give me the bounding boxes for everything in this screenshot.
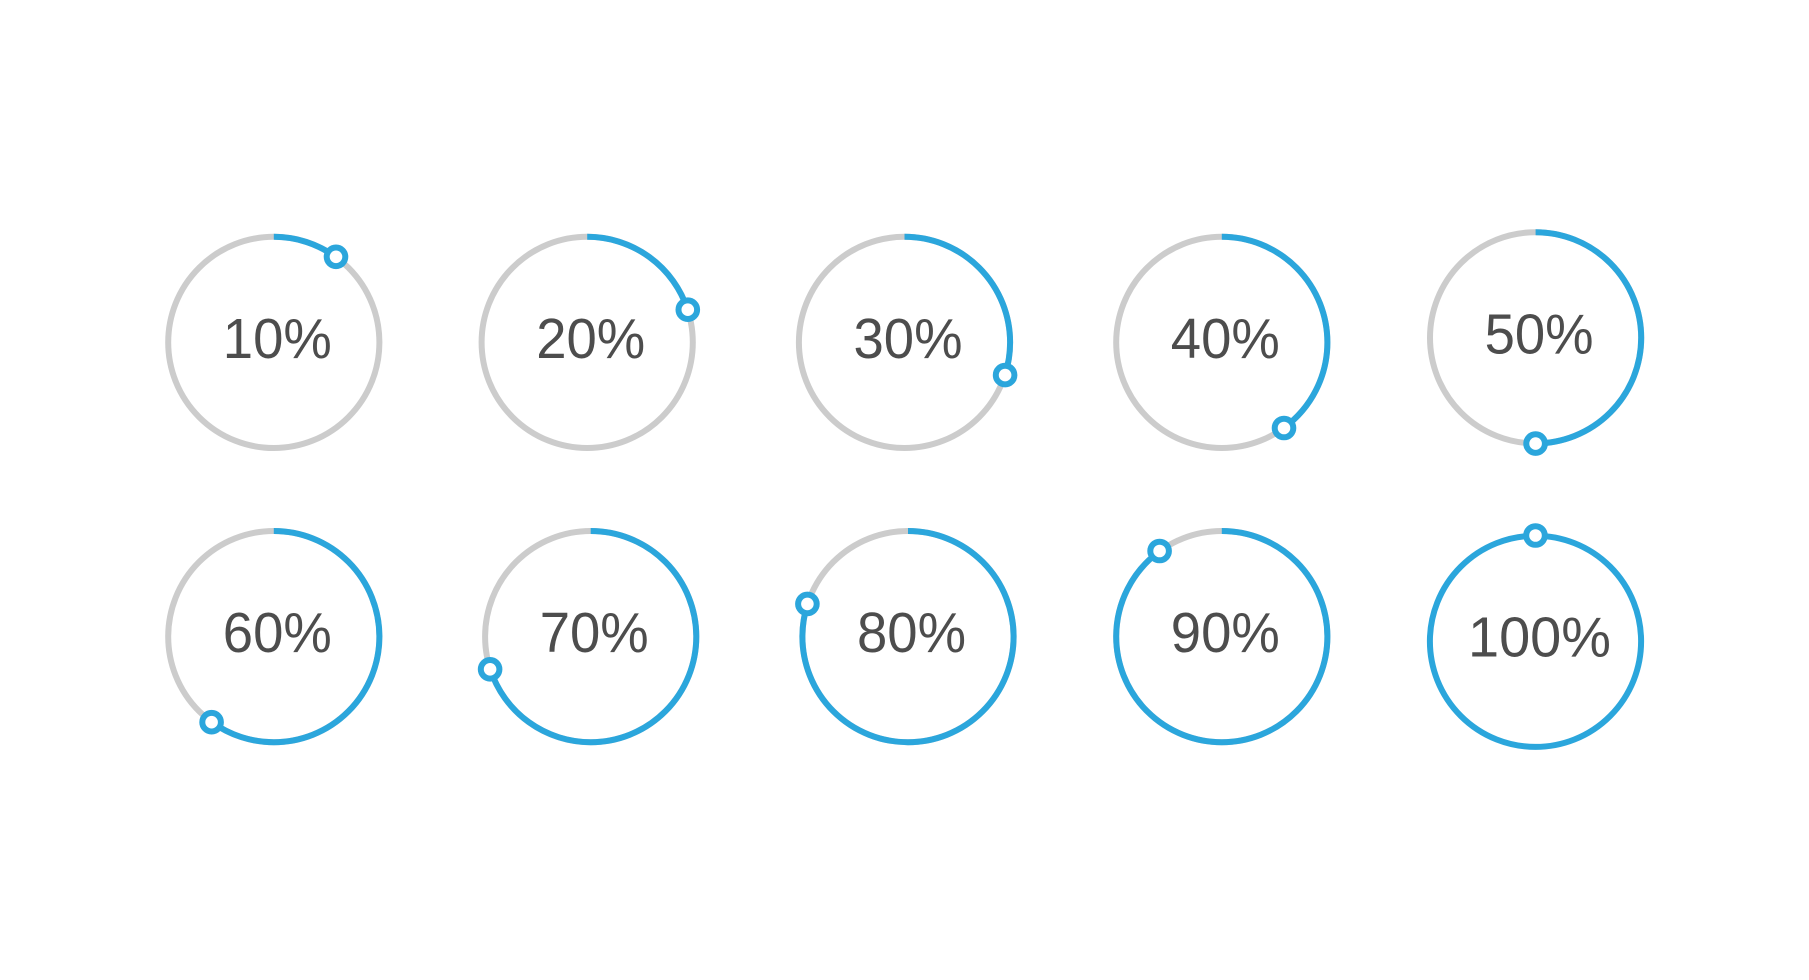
progress ring: 40%: 40% — [1171, 307, 1280, 371]
progress ring: 100%: 100% — [1468, 605, 1611, 669]
progress ring: 80%: 80% — [857, 601, 966, 665]
progress ring: 10%: 10% — [223, 307, 332, 371]
progress ring: 60%: 60% — [223, 601, 332, 665]
progress ring: 70% — [481, 531, 696, 742]
progress ring: 90% — [1116, 531, 1327, 742]
progress ring: 50% — [1430, 232, 1641, 453]
progress ring: 100% — [1430, 526, 1641, 747]
progress ring: 50%: 50% — [1485, 302, 1594, 366]
progress ring: 40% — [1116, 237, 1327, 448]
progress ring: 10% — [168, 237, 379, 448]
progress ring: 20% — [482, 237, 697, 448]
progress ring: 20%: 20% — [536, 307, 645, 371]
progress ring: 30%: 30% — [854, 307, 962, 371]
progress ring: 70%: 70% — [540, 601, 649, 665]
progress ring: 90%: 90% — [1171, 601, 1280, 665]
progress ring: 80% — [798, 531, 1014, 742]
progress ring: 30% — [799, 237, 1014, 448]
progress ring: 60% — [168, 531, 379, 742]
